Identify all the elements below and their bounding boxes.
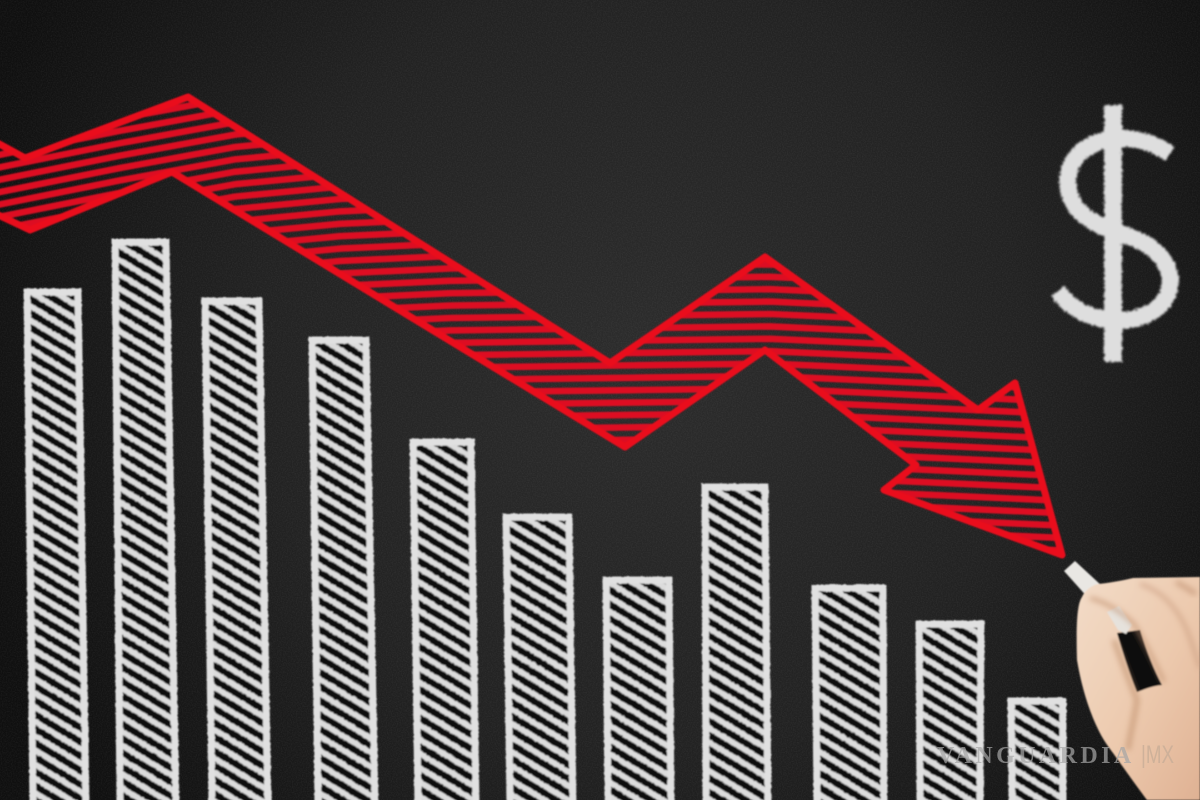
index finger shading <box>1090 598 1164 682</box>
red downward trend arrow <box>0 92 1066 560</box>
bar 5 <box>413 442 476 800</box>
icon: chalk dollar sign <box>1058 105 1170 362</box>
bar 8 <box>705 487 768 800</box>
hand holding chalk <box>1064 561 1200 800</box>
chalk stick <box>1064 561 1102 600</box>
dollar S curve <box>1058 139 1170 320</box>
chalk tip under fingers <box>1107 606 1132 634</box>
bar 6 <box>506 517 573 800</box>
gap between thumb and finger <box>1117 630 1162 692</box>
knuckle shading <box>1176 582 1196 594</box>
bar 2 <box>115 242 176 800</box>
hand shape <box>1077 577 1200 800</box>
watermark country code: |MX <box>1141 741 1174 769</box>
watermark <box>937 741 1174 769</box>
arrow hatching <box>0 102 1058 550</box>
watermark wordmark: VANGUARDIA <box>937 743 1135 769</box>
bar 9 <box>815 588 884 800</box>
bar 3 <box>205 301 268 800</box>
bar 7 <box>606 580 671 800</box>
bar chart: hatched chalk bars <box>27 242 1063 800</box>
bar 11 <box>1011 701 1063 800</box>
dollar vertical stroke <box>1104 105 1122 362</box>
thumb shadow <box>1114 640 1137 750</box>
bar 1 <box>27 292 86 800</box>
bar 10 <box>919 624 981 800</box>
bar 4 <box>312 340 375 800</box>
arrow outline <box>0 97 1062 555</box>
middle finger shading <box>1140 584 1200 668</box>
